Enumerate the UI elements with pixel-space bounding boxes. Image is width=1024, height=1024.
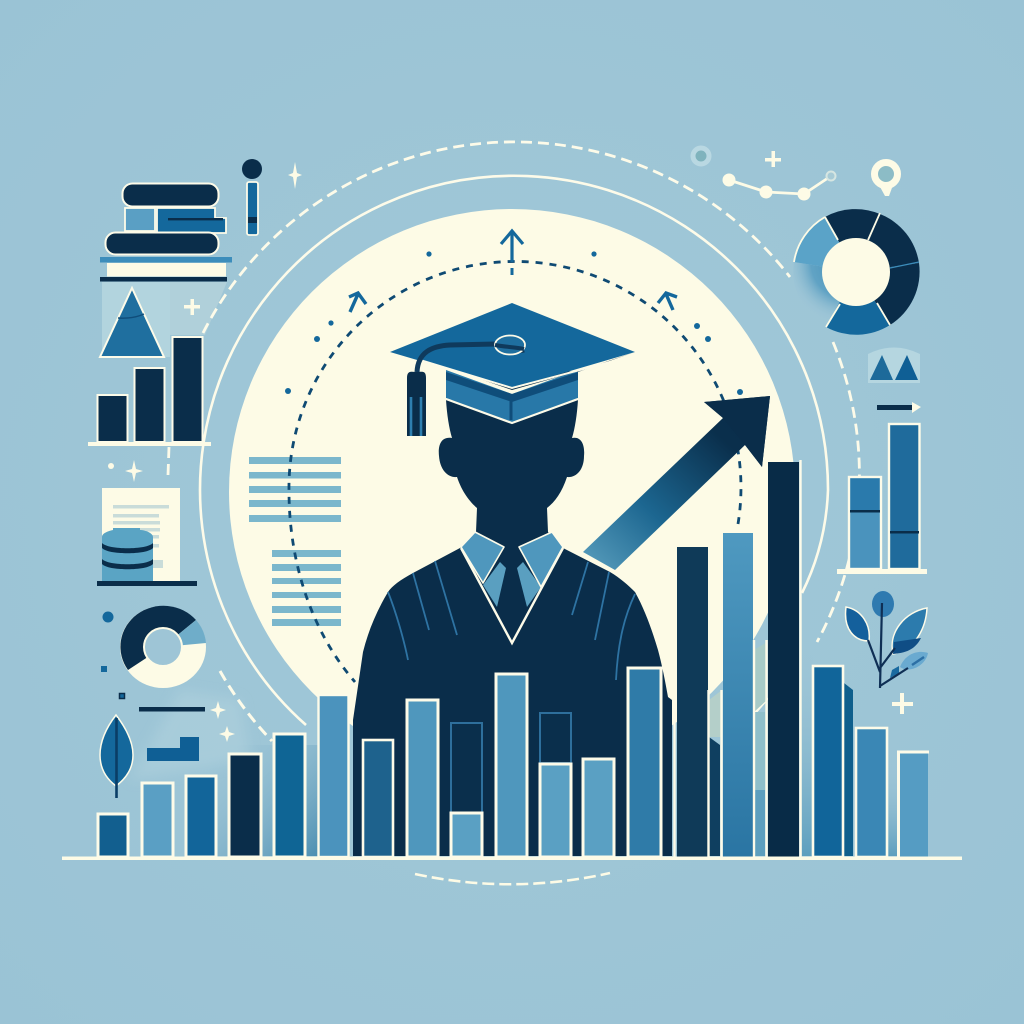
icon: line chart nodes (722, 172, 836, 200)
cream bar separators (674, 460, 800, 857)
arrow: up left (349, 293, 366, 312)
cap board (390, 303, 635, 390)
texture patches (130, 282, 899, 856)
collar upper (461, 532, 563, 587)
small arrow right (877, 402, 921, 413)
cap base (446, 370, 578, 423)
body (353, 400, 672, 856)
gown neckline (461, 548, 563, 643)
plus sign top right (765, 151, 781, 167)
plus signs lower left (210, 701, 235, 742)
icon: step block (147, 737, 199, 761)
icon: leaf (100, 715, 133, 798)
bottom dashed arc (415, 873, 610, 884)
scattered dots (285, 251, 743, 395)
icon: location pin (874, 162, 898, 196)
graduate figure (353, 303, 672, 856)
icon: document and database (97, 488, 197, 586)
icon: twin triangles (868, 348, 920, 383)
gown folds (388, 561, 635, 680)
baseline (62, 856, 962, 860)
arrow: up right (658, 293, 677, 310)
inner dashed arc with arrows (289, 231, 741, 682)
icon: pin marker (242, 159, 262, 235)
rising arrow (583, 396, 770, 570)
icon: books (100, 184, 232, 282)
arrow: up centre (501, 231, 523, 275)
small shapes left (101, 612, 205, 712)
icon: plant (846, 591, 928, 688)
icon: triangle panel (100, 282, 170, 357)
text lines bottom (272, 550, 341, 626)
bar chart (98, 460, 929, 857)
small bar chart left (88, 337, 211, 446)
donut chart right (793, 209, 920, 335)
right small bar chart (837, 424, 927, 574)
outer ring (200, 176, 828, 725)
sparkle and dot (108, 460, 143, 482)
icon: ring (693, 148, 709, 164)
text lines top (249, 457, 341, 522)
plus sign right (892, 693, 913, 714)
collar lower (483, 562, 541, 607)
donut chart left (120, 606, 206, 688)
sun circle (229, 209, 795, 775)
plus sign (184, 299, 200, 315)
outer dashed arc (168, 142, 859, 741)
icon: sparkle (288, 162, 302, 189)
tassel (407, 336, 525, 436)
bar gap fills (709, 642, 767, 856)
